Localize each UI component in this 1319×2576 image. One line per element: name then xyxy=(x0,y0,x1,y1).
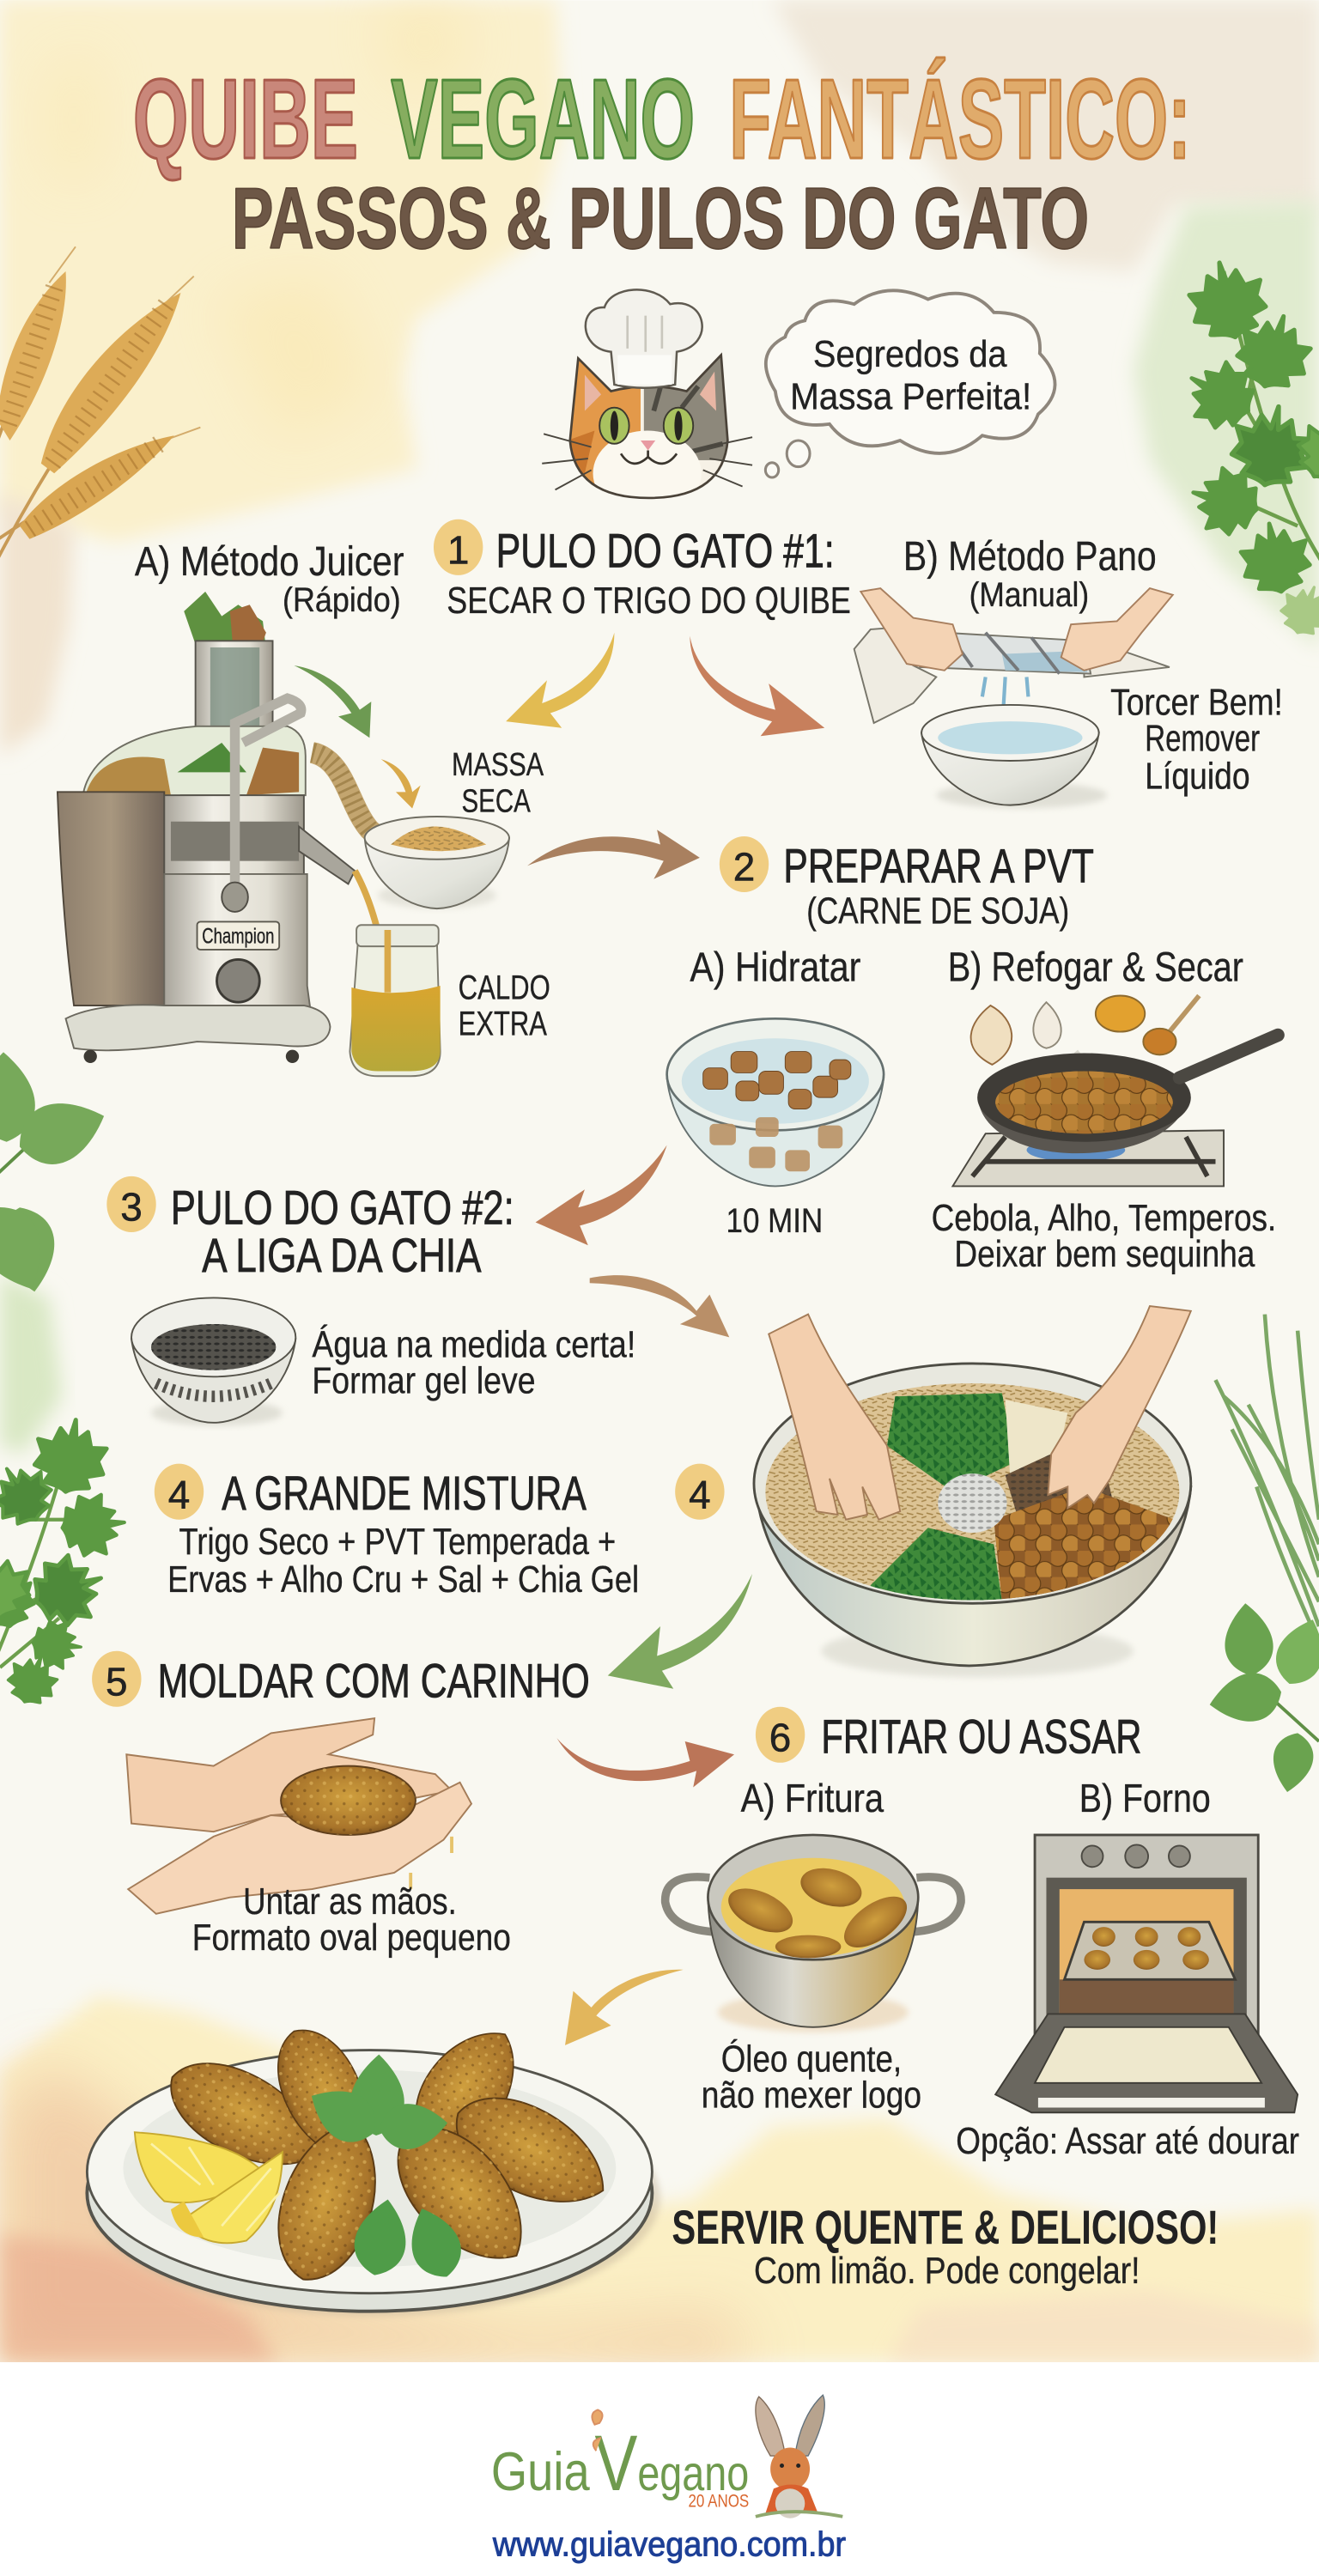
kibes xyxy=(154,2012,623,2293)
right hand xyxy=(1048,1306,1191,1508)
label: massa seca: SECA xyxy=(462,782,531,819)
step 3 heading: 3 xyxy=(120,1185,143,1230)
label: caldo extra xyxy=(459,968,550,1042)
icon: frying pan on stove xyxy=(952,996,1278,1186)
cat head xyxy=(542,352,752,500)
arrow: yellow to juicer xyxy=(506,633,614,728)
label: agua na medida: Formar gel leve xyxy=(312,1359,536,1401)
title xyxy=(133,56,1191,267)
label: oleo quente xyxy=(702,2038,921,2117)
step 1 heading xyxy=(434,519,851,622)
icon: juicer xyxy=(58,592,403,1063)
icon: parsley left xyxy=(0,1415,127,1710)
step 1 heading: 1 xyxy=(447,527,469,572)
label: torcer bem: Remover xyxy=(1145,718,1260,760)
step 4 heading and text: Trigo Seco + PVT Temperada + xyxy=(179,1521,616,1563)
cloth xyxy=(854,624,936,723)
label: agua na medida: Água na medida certa! xyxy=(312,1323,635,1365)
baking tray xyxy=(1065,1922,1235,1979)
label: metodo pano: B) Método Pano xyxy=(903,534,1157,580)
label: untar as maos xyxy=(192,1880,511,1959)
step 6 heading xyxy=(756,1707,1141,1763)
step 2 heading xyxy=(720,836,1094,932)
oven door xyxy=(995,2014,1298,2112)
label: 10 min: 10 MIN xyxy=(726,1201,823,1240)
label: oleo quente: Óleo quente, xyxy=(721,2038,902,2080)
stove xyxy=(952,1130,1224,1186)
icon: rabbit mascot xyxy=(756,2395,842,2518)
icon: mint right xyxy=(1206,1601,1319,1795)
label: fritura: A) Fritura xyxy=(741,1776,884,1820)
label: forno: B) Forno xyxy=(1079,1776,1211,1820)
label: metodo juicer: A) Método Juicer xyxy=(135,539,404,585)
step 4 heading and text: 4 xyxy=(168,1472,190,1516)
knob xyxy=(216,959,259,1002)
label: massa seca xyxy=(452,746,544,819)
closing text: Com limão. Pode congelar! xyxy=(754,2250,1140,2292)
label: untar as maos: Formato oval pequeno xyxy=(192,1917,511,1959)
step 3 heading: PULO DO GATO #2: xyxy=(171,1181,514,1234)
logo: Vegano xyxy=(594,2420,749,2507)
left hand xyxy=(860,588,963,671)
brown body xyxy=(58,792,164,1005)
arrow: to step 3 xyxy=(536,1145,667,1245)
logo xyxy=(491,2409,749,2511)
step 5 heading xyxy=(92,1651,590,1707)
step 4 badge near bowl: 4 xyxy=(689,1472,711,1516)
label: massa seca: MASSA xyxy=(452,746,544,783)
arrow: small yellow to bowl xyxy=(381,759,421,808)
arrow: herbs into juicer xyxy=(294,665,371,738)
pan xyxy=(979,1097,1189,1153)
arrow: to step 5 xyxy=(608,1574,752,1689)
stream of dry mass xyxy=(312,752,403,858)
icon: wheat stalks xyxy=(0,246,200,567)
label: caldo extra: CALDO xyxy=(459,968,550,1006)
closing text xyxy=(672,2201,1219,2292)
step 3 heading: A LIGA DA CHIA xyxy=(202,1229,481,1282)
icon: hands forming kibe xyxy=(126,1718,471,1914)
icon: wringing cloth xyxy=(854,588,1173,732)
mint garnish center xyxy=(300,2053,449,2153)
arrow: to big bowl xyxy=(590,1275,729,1337)
arrow: to plate xyxy=(565,1970,684,2045)
stream of broth xyxy=(355,871,387,982)
icon: glass bowl with soy xyxy=(667,1018,884,1186)
label: untar as maos: Untar as mãos. xyxy=(243,1880,457,1923)
label: hidratar: A) Hidratar xyxy=(690,945,860,990)
label: refogar e secar: B) Refogar & Secar xyxy=(948,945,1243,990)
icon: bowl with water xyxy=(921,705,1107,808)
label: agua na medida xyxy=(312,1323,635,1401)
label: cebola alho temperos xyxy=(932,1197,1276,1275)
arrow: to step 2 xyxy=(527,829,700,879)
icon: plate of kibes xyxy=(87,2012,660,2316)
icon: jar of broth xyxy=(350,925,441,1076)
step 2 heading: (CARNE DE SOJA) xyxy=(806,890,1069,932)
thought bubble xyxy=(765,290,1055,477)
label: oleo quente: não mexer logo xyxy=(702,2075,921,2117)
step 3 heading xyxy=(106,1176,514,1282)
step 6 heading: 6 xyxy=(769,1715,791,1759)
logo: 20 ANOS xyxy=(688,2491,749,2511)
ingredients xyxy=(971,996,1199,1065)
label: torcer bem xyxy=(1110,681,1283,798)
label: torcer bem: Torcer Bem! xyxy=(1110,681,1283,723)
herbs in feed tube xyxy=(184,592,266,651)
steam xyxy=(1035,1052,1109,1114)
step 1 heading: SECAR O TRIGO DO QUIBE xyxy=(447,580,851,622)
thought bubble: Massa Perfeita! xyxy=(790,376,1031,418)
base xyxy=(66,1005,330,1063)
left hand xyxy=(769,1315,900,1520)
website url: www.guiavegano.com.br xyxy=(492,2525,846,2564)
icon: bowl of chia xyxy=(131,1297,295,1426)
step 5 heading: 5 xyxy=(106,1659,128,1704)
feed tube xyxy=(196,641,273,736)
arrow: red to cloth xyxy=(690,636,824,736)
body xyxy=(164,874,312,1022)
logo: Guia xyxy=(491,2442,590,2502)
icon: bowl of dry mass xyxy=(365,817,509,908)
icon: frying pot xyxy=(666,1835,961,2032)
step 2 heading: PREPARAR A PVT xyxy=(783,840,1094,893)
step 4 heading and text xyxy=(155,1464,639,1601)
label: metodo pano: (Manual) xyxy=(969,575,1089,614)
icon: oven xyxy=(995,1835,1298,2112)
step 5 heading: MOLDAR COM CARINHO xyxy=(158,1654,590,1707)
step 6 heading: FRITAR OU ASSAR xyxy=(821,1710,1141,1763)
icon: mint left xyxy=(0,1051,114,1302)
arrow: to step 6 xyxy=(556,1738,734,1787)
label: caldo extra: EXTRA xyxy=(459,1004,547,1042)
mint garnish bottom xyxy=(350,2195,470,2285)
icon: big mixing bowl with hands xyxy=(754,1306,1191,1677)
footer white band xyxy=(0,2362,1319,2576)
chef hat xyxy=(586,289,702,388)
step 4 heading and text: Ervas + Alho Cru + Sal + Chia Gel xyxy=(167,1558,639,1601)
thought bubble: Segredos da xyxy=(813,333,1007,375)
step 4 badge near bowl xyxy=(675,1464,725,1520)
spout xyxy=(299,826,355,884)
contents xyxy=(765,1383,1179,1601)
label: metodo juicer: (Rápido) xyxy=(283,580,401,619)
badge xyxy=(198,921,279,950)
step 1 heading: PULO DO GATO #1: xyxy=(496,524,835,577)
title: VEGANO xyxy=(391,56,695,182)
icon: chef cat xyxy=(542,289,752,516)
label: torcer bem: Líquido xyxy=(1145,756,1250,798)
icon: parsley top right xyxy=(1176,255,1319,641)
step 4 heading and text: A GRANDE MISTURA xyxy=(222,1467,587,1520)
motor collar xyxy=(164,795,304,878)
step 2 heading: 2 xyxy=(733,845,755,890)
right hand xyxy=(1061,588,1173,671)
icon: chives right xyxy=(1215,1315,1319,1643)
dome xyxy=(82,726,306,805)
lemons xyxy=(135,2132,283,2243)
label: metodo juicer xyxy=(135,539,404,619)
plunger xyxy=(235,698,301,903)
title: QUIBE xyxy=(133,56,358,182)
drops xyxy=(982,677,1028,732)
label: metodo pano xyxy=(903,534,1157,614)
badge: Champion xyxy=(202,924,274,948)
label: cebola alho temperos: Deixar bem sequinha xyxy=(954,1233,1255,1275)
